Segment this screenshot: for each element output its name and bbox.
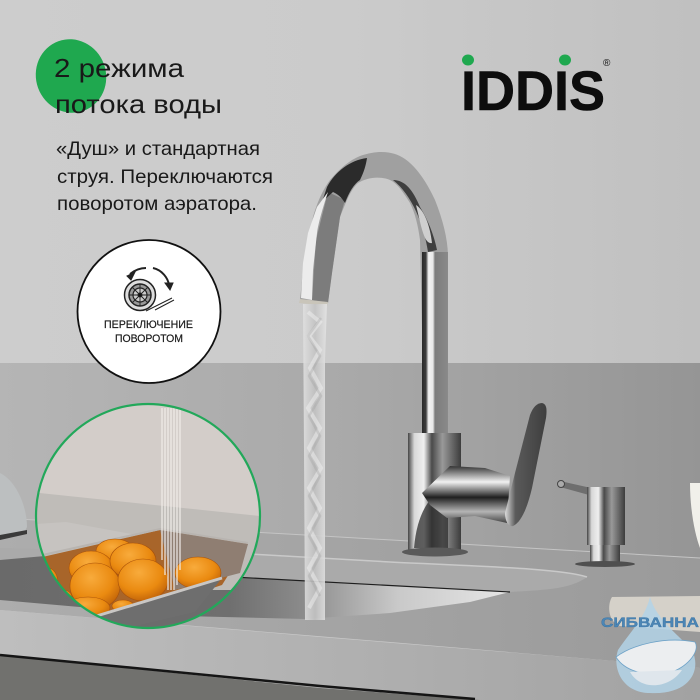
spout arch	[300, 152, 448, 435]
inset: shower mode over oranges	[34, 402, 262, 630]
watermark	[601, 597, 699, 693]
handle lever	[505, 403, 547, 526]
icon: aerator	[124, 280, 174, 311]
icon: rotation arrows	[127, 268, 173, 290]
dispenser	[558, 480, 635, 567]
heading: 2 режима	[54, 53, 185, 83]
logo: ®	[603, 58, 611, 69]
basket top rim	[44, 530, 248, 554]
counter back highlight	[0, 518, 700, 558]
green blob accent	[25, 29, 117, 123]
description: струя. Переключаются	[57, 166, 273, 188]
inner arch dark band	[393, 180, 437, 252]
spout left highlight	[301, 192, 328, 300]
backsplash	[0, 363, 700, 563]
inset ring	[36, 404, 260, 628]
base cylinder	[408, 433, 461, 551]
basket back right panel	[160, 530, 248, 590]
towel	[609, 596, 700, 632]
faucet	[299, 152, 547, 556]
sink rim highlight	[233, 553, 587, 577]
kettle on the left	[0, 473, 27, 540]
description: поворотом аэратора.	[57, 193, 257, 215]
badge label: ПОВОРОТОМ	[115, 333, 183, 345]
wall background	[0, 0, 700, 364]
inset sink	[135, 590, 230, 627]
sink basin	[0, 556, 510, 619]
tube	[422, 252, 448, 434]
description	[56, 138, 273, 215]
description: «Душ» и стандартная	[56, 138, 260, 160]
counter front face	[0, 610, 700, 700]
inset sink corner	[36, 522, 137, 555]
countertop	[0, 518, 700, 668]
basket front rim	[90, 578, 222, 618]
inset wall	[40, 405, 259, 516]
logo: IDDIS	[461, 59, 605, 122]
cup on the right	[690, 483, 700, 548]
raised basin rim	[0, 548, 587, 596]
aerator	[299, 299, 328, 306]
shower streams	[162, 408, 180, 590]
basket front	[100, 580, 220, 621]
handle body	[422, 466, 510, 523]
spout dark reflection	[322, 158, 367, 203]
badge label: ПЕРЕКЛЮЧЕНИЕ	[104, 319, 193, 331]
water stream	[303, 304, 327, 624]
cabinet below counter	[0, 655, 480, 700]
arch inner oval reflection	[416, 205, 432, 243]
badge: switching by rotation	[78, 240, 220, 383]
inset counter	[37, 493, 259, 590]
base flange	[402, 548, 468, 556]
heading	[54, 53, 222, 119]
counter shadow line	[0, 655, 475, 699]
badge label	[104, 319, 193, 345]
sink top edge	[233, 577, 510, 592]
basket back	[44, 530, 248, 610]
watermark: СИБВАННА	[601, 615, 699, 630]
heading: потока воды	[55, 89, 222, 119]
spout left leg shade	[312, 192, 345, 303]
oranges	[50, 538, 222, 614]
base dark curve	[414, 500, 448, 548]
